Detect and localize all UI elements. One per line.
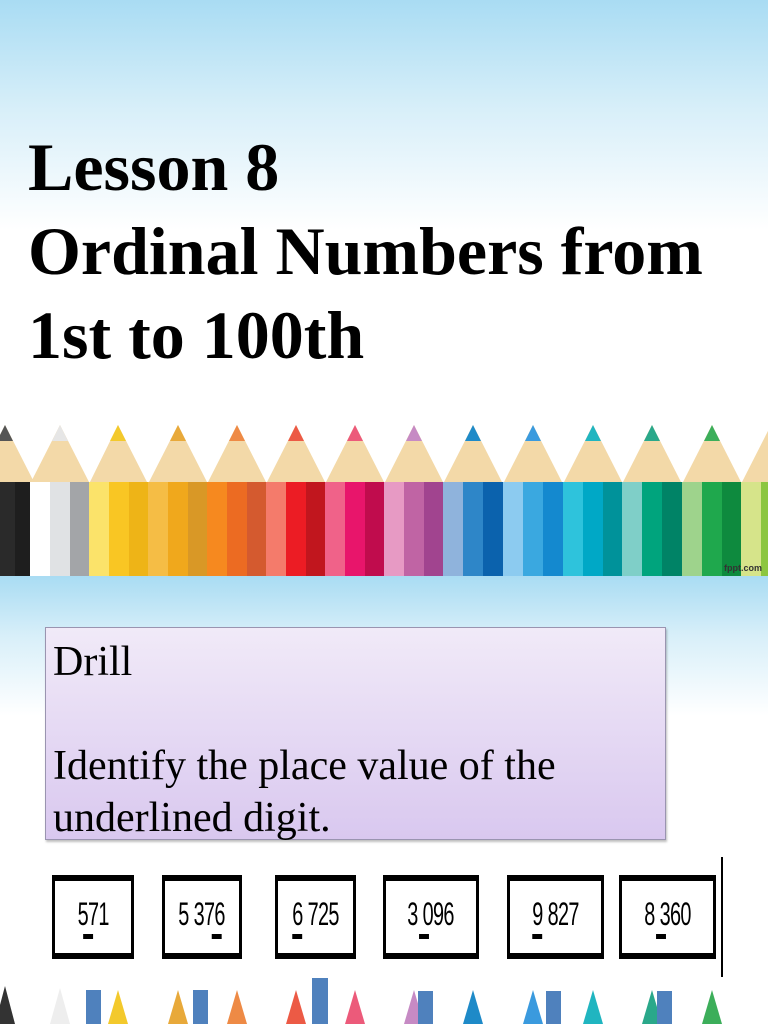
drill text box: Identify the place value of the <box>53 743 556 789</box>
vertical line <box>721 857 723 977</box>
title <box>28 129 703 373</box>
number boxes <box>52 875 716 959</box>
number boxes: 8 360 <box>644 896 691 932</box>
slide 2 background <box>0 576 768 1024</box>
title: 1st to 100th <box>28 297 364 373</box>
number boxes: 571 <box>77 896 109 932</box>
pencils row: fppt.com <box>724 563 762 573</box>
drill text box <box>45 627 666 840</box>
slide 1 background <box>0 0 768 576</box>
drill text box: Drill <box>53 639 132 685</box>
drill text box: underlined digit. <box>53 795 331 841</box>
pencils row <box>0 425 768 576</box>
number boxes: 9 827 <box>532 896 579 932</box>
bottom bars and pencil tips <box>0 978 722 1024</box>
number boxes: 3 096 <box>408 896 454 932</box>
title: Lesson 8 <box>28 129 279 205</box>
number boxes: 6 725 <box>292 896 339 932</box>
title: Ordinal Numbers from <box>28 213 703 289</box>
number boxes: 5 376 <box>179 896 225 932</box>
